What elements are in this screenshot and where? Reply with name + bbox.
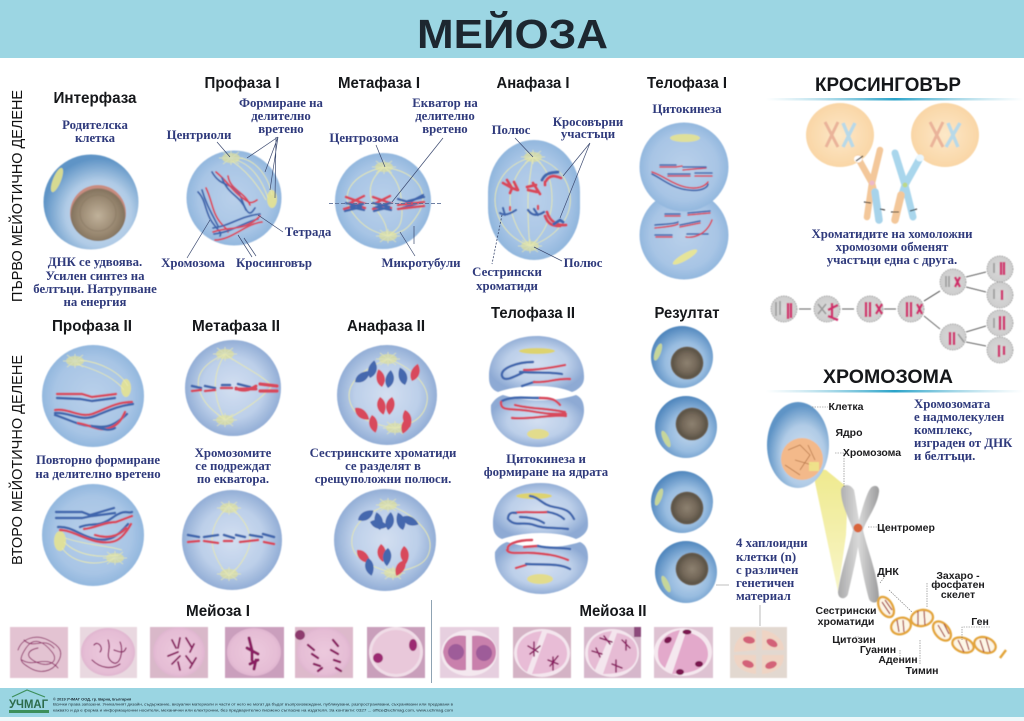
description: материал <box>736 589 791 603</box>
micrograph 3 <box>150 627 208 678</box>
label: thymine: Тимин <box>905 665 939 677</box>
label: crossover parts: участъци <box>561 127 616 141</box>
description: Сестринските хроматиди <box>310 446 457 460</box>
label: spindle: Формиране на <box>239 96 324 110</box>
label: tetrad: Тетрада <box>285 225 332 239</box>
label: cytokinesis: Цитокинеза <box>652 102 722 116</box>
description: генетичен <box>736 576 795 590</box>
label: sister chromatids: хроматиди <box>818 616 874 628</box>
label: nucleus: Ядро <box>835 427 863 439</box>
cell <box>335 153 431 249</box>
label: sugar-phosphate backbone: Захаро - <box>936 570 980 582</box>
result cell 4 <box>655 541 717 603</box>
cell bottom <box>493 483 588 594</box>
cell bottom <box>334 489 436 591</box>
label: crossover parts: Кросовърни <box>553 115 624 129</box>
description: Хромозомите <box>195 446 272 460</box>
heading: Анафаза II <box>347 318 425 335</box>
heading: Интерфаза <box>54 90 137 107</box>
description: 4 хаплоидни <box>736 536 808 550</box>
cell bottom <box>42 484 144 586</box>
result cell 3 <box>651 471 713 533</box>
result cell 2 <box>655 396 717 458</box>
description: белтъци. Натрупване <box>33 282 157 296</box>
equator line <box>329 203 441 205</box>
leader lines <box>716 585 760 626</box>
cell top <box>489 336 584 447</box>
description: ДНК се удвоява. <box>48 255 142 269</box>
description: формиране на ядрата <box>484 465 609 479</box>
description: се разделят в <box>345 459 421 473</box>
copyright text: © 2019 УЧМАГ ООД, гр. Варна, България <box>53 696 131 702</box>
title band <box>0 0 1024 58</box>
label: centromere: Центромер <box>877 522 935 534</box>
title: МЕЙОЗА <box>417 11 608 57</box>
cell bottom <box>182 490 282 590</box>
description: и белтъци. <box>914 449 975 463</box>
heading: ХРОМОЗОМА <box>823 367 953 388</box>
label: pole bottom: Полюс <box>564 256 603 270</box>
heading: Анафаза I <box>496 75 570 92</box>
result cell 1 <box>651 326 713 388</box>
description: се подреждат <box>195 459 271 473</box>
illustration: cell with nucleus <box>767 402 829 488</box>
label: sugar-phosphate backbone: фосфатен <box>931 579 985 591</box>
label: sister chromatids: Сестрински <box>815 605 877 617</box>
micrograph 2 <box>80 627 137 678</box>
label: chromosome: Хромозома <box>161 256 225 270</box>
label: sugar-phosphate backbone: скелет <box>941 589 975 601</box>
panel: prophase II <box>35 318 161 586</box>
panel: micrographs meiosis I <box>10 603 425 678</box>
description: изграден от ДНК <box>914 436 1013 450</box>
divider between meiosis I and II <box>431 600 432 683</box>
heading: Телофаза I <box>647 75 727 92</box>
label: microtubules: Микротубули <box>381 256 461 270</box>
micrograph 10 <box>654 627 713 678</box>
cell top <box>185 340 281 436</box>
panel: metaphase II <box>182 318 282 590</box>
label: parent cell: Родителска <box>62 118 128 132</box>
label: cytosine: Цитозин <box>832 634 876 646</box>
illustration: DNA helix <box>875 594 1006 658</box>
description: Повторно формиране <box>36 453 160 467</box>
illustration: homologous chromosomes <box>806 103 979 220</box>
cell <box>640 122 728 280</box>
panel: anaphase I <box>472 75 624 293</box>
micrograph 6 <box>367 627 425 678</box>
micrograph 11 <box>730 627 787 678</box>
description: с различен <box>736 563 799 577</box>
heading: Профаза I <box>204 75 280 92</box>
heading: Профаза II <box>52 318 132 335</box>
label: centrioles: Центриоли <box>167 128 232 142</box>
description: е надмолекулен <box>914 410 1005 424</box>
cell top <box>42 345 144 447</box>
heading: Метафаза II <box>192 318 280 335</box>
description: на енергия <box>64 295 127 309</box>
side label: second division: ВТОРО МЕЙОТИЧНО ДЕЛЕНЕ <box>8 355 26 565</box>
heading: КРОСИНГОВЪР <box>815 75 961 96</box>
leader lines <box>812 407 990 665</box>
description: клетки (n) <box>736 550 796 564</box>
footer band <box>0 688 1024 721</box>
logo <box>9 690 49 713</box>
heading: Метафаза I <box>338 75 420 92</box>
micrograph 4 <box>225 627 284 678</box>
label: crossing over: Кросинговър <box>236 256 312 270</box>
cell top <box>337 345 437 445</box>
description: комплекс, <box>914 423 972 437</box>
leader lines <box>187 137 283 258</box>
panel: micrographs meiosis II <box>440 603 787 678</box>
illustration: chromosome X <box>838 485 879 603</box>
label: pole top: Полюс <box>492 123 531 137</box>
label: equator: вретено <box>422 122 468 136</box>
copyright text: каквато и да е форма и информационни носители, механични или електронни, без предварително писмено съгласие на издателя. За контакти: 0327 ... office@uchmag.com, www.uchmag.com <box>53 708 453 712</box>
leader lines <box>376 138 443 256</box>
heading: Резултат <box>654 305 720 322</box>
heading: Мейоза II <box>580 603 646 620</box>
label: sister chromatids: хроматиди <box>476 279 539 293</box>
description: на делително вретено <box>35 467 161 481</box>
description: участъци една с друга. <box>827 253 957 267</box>
panel: interphase <box>33 90 157 309</box>
micrograph 9 <box>584 627 641 678</box>
panel: prophase I <box>161 75 332 270</box>
heading: Телофаза II <box>491 305 575 322</box>
label: chromosome: Хромозома <box>843 447 901 459</box>
description: по екватора. <box>197 472 269 486</box>
description: срещуположни полюси. <box>315 472 451 486</box>
panel: crossing over <box>765 75 1024 363</box>
micrograph 1 <box>10 627 68 678</box>
label: cell: Клетка <box>829 401 864 413</box>
side label: first division: ПЪРВО МЕЙОТИЧНО ДЕЛЕНЕ <box>8 90 26 302</box>
panel: metaphase I <box>329 75 478 270</box>
panel: chromosome <box>765 367 1024 677</box>
label: equator: Екватор на <box>412 96 478 110</box>
yellow zoom cone <box>812 468 848 592</box>
label: gene: Ген <box>971 616 989 628</box>
label: spindle: делително <box>251 109 311 123</box>
label: DNA: ДНК <box>877 566 899 578</box>
description: Усилен синтез на <box>45 269 145 283</box>
micrograph 7 <box>440 627 499 678</box>
panel: anaphase II <box>310 318 457 591</box>
copyright text: Всички права запазени. Уникалният дизайн, съдържание, визуални материали и части от него не могат да бъдат възпроизвеждани, публикувани, разпространявани, съхранявани или предавани в <box>53 702 453 706</box>
heading: Мейоза I <box>186 603 250 620</box>
panel: result <box>651 305 808 626</box>
micrograph 8 <box>513 627 571 678</box>
panel: telophase II <box>484 305 609 594</box>
leader lines <box>515 138 590 218</box>
label: guanine: Гуанин <box>860 644 896 656</box>
label: sister chromatids: Сестрински <box>472 265 542 279</box>
diagram: division tree <box>771 256 1013 363</box>
label: equator: делително <box>415 109 475 123</box>
description: Цитокинеза и <box>506 452 586 466</box>
description: Хроматидите на хомоложни <box>812 227 973 241</box>
cell <box>44 154 138 250</box>
label: centrosome: Центрозома <box>329 131 399 145</box>
label: adenine: Аденин <box>878 654 918 666</box>
description: хромозоми обменят <box>836 240 949 254</box>
micrograph 5 <box>295 627 353 678</box>
logo: УЧМАГ <box>9 697 48 711</box>
label: parent cell: клетка <box>75 131 116 145</box>
panel: telophase I <box>640 75 728 280</box>
description: Хромозомата <box>914 397 991 411</box>
cell <box>488 140 580 260</box>
label: spindle: вретено <box>258 122 304 136</box>
cell <box>186 150 282 246</box>
